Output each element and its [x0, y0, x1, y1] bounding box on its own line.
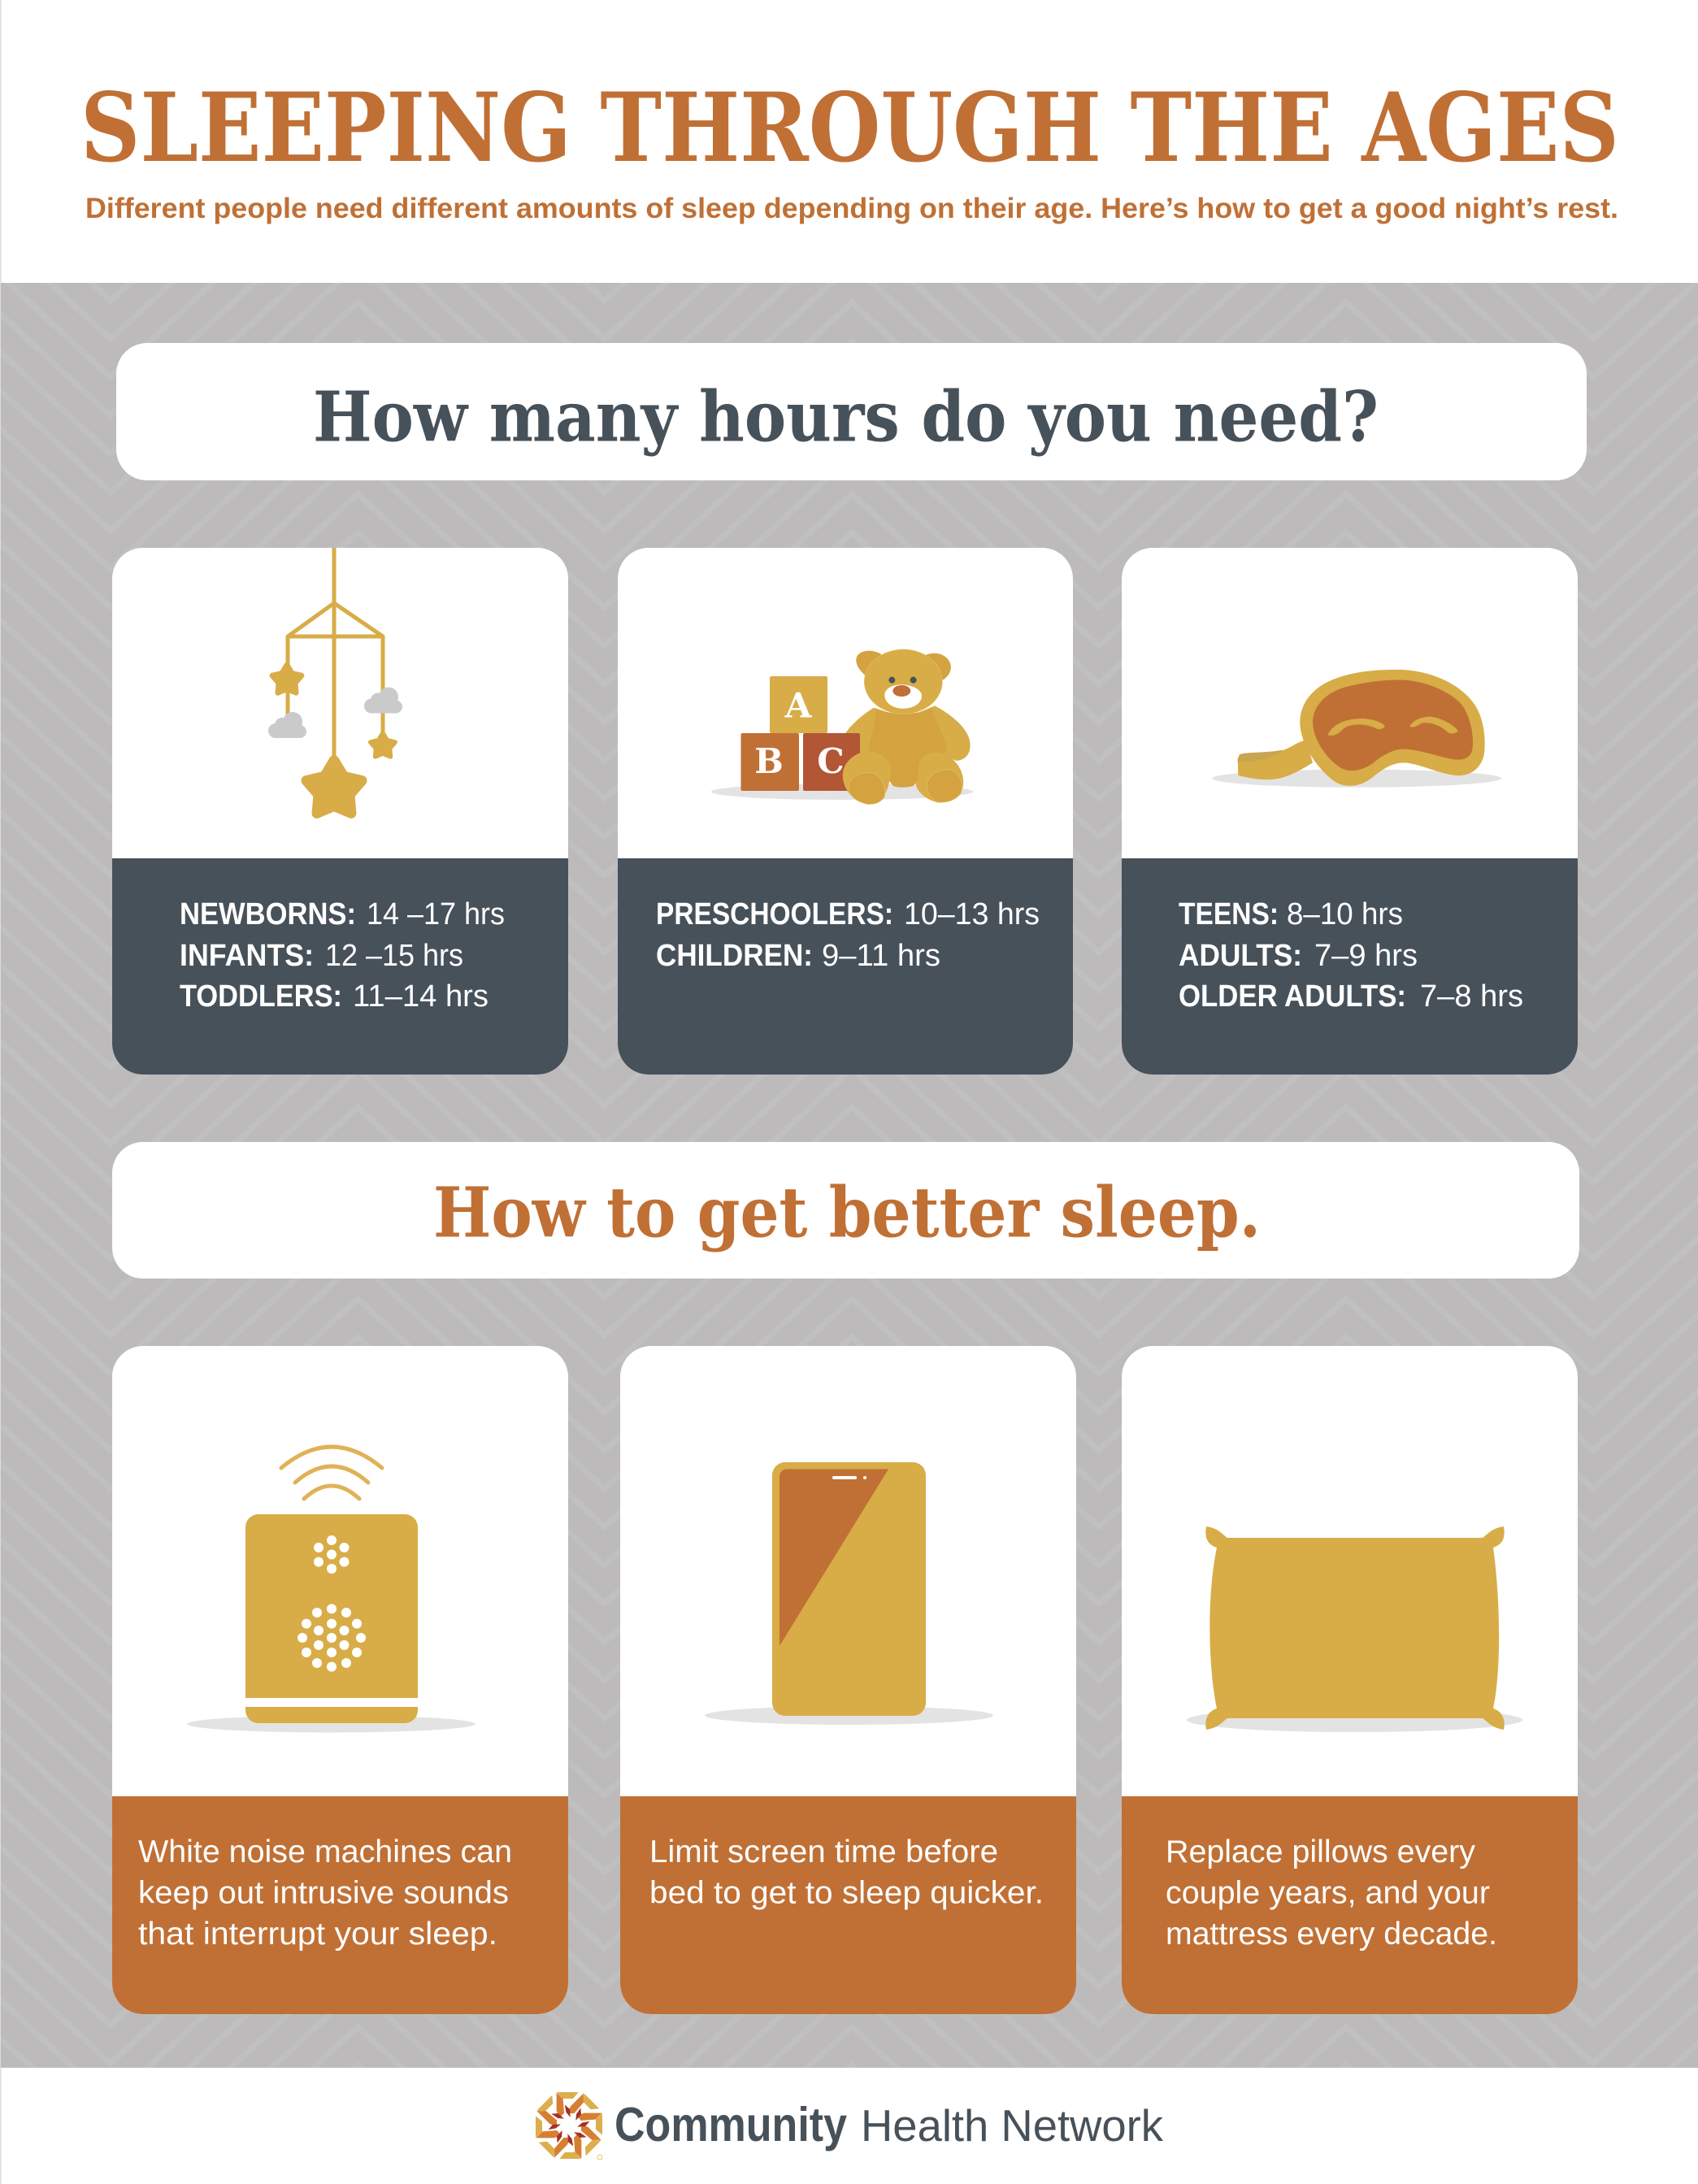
- text: newborns: 14 –17 hrs: [367, 897, 505, 931]
- text: pillow tip: Replace pillows every: [1166, 1834, 1475, 1869]
- icon: teddy bear and blocks: [711, 649, 973, 804]
- text: teens: 8–10 hrs: [1287, 897, 1403, 931]
- bear front: head and legs: [843, 649, 963, 804]
- text: children: CHILDREN:: [656, 939, 813, 973]
- panel: pillow tip: [1122, 1346, 1578, 2014]
- text: toddlers: 11–14 hrs: [353, 979, 489, 1014]
- icon: baby mobile: [268, 548, 402, 814]
- text: screen time tip: [649, 1834, 1044, 1910]
- blocks: A B C: B: [754, 741, 784, 781]
- text: children: [656, 939, 940, 973]
- panel: screen time tip: [620, 1346, 1076, 2014]
- subtitle: Different people need different amounts of sleep depending on their age. Here’s how to get a good night’s rest.: [85, 193, 1618, 224]
- logo wordmark: health network: Health Network: [861, 2100, 1163, 2151]
- text: infants: [180, 939, 463, 973]
- text: teens: [1179, 897, 1403, 931]
- text: newborns: [180, 897, 505, 931]
- text: teens: TEENS:: [1179, 897, 1279, 931]
- text: adults: 7–9 hrs: [1314, 939, 1418, 973]
- panel: header: [80, 72, 1619, 224]
- text: adults: [1179, 939, 1418, 973]
- heading: how many hours: How many hours do you need?: [313, 377, 1379, 458]
- text: older adults: 7–8 hrs: [1420, 979, 1523, 1014]
- text: white noise tip: [138, 1834, 512, 1952]
- blocks: A B C: C: [817, 741, 845, 781]
- panel: white noise tip: [112, 1346, 568, 2014]
- icon: pillow: [1187, 1526, 1522, 1732]
- text: pillow tip: [1166, 1834, 1497, 1952]
- blocks: A B C: A: [784, 686, 813, 725]
- text: newborns: NEWBORNS:: [180, 897, 356, 931]
- text: preschoolers: 10–13 hrs: [904, 897, 1040, 931]
- text: toddlers: [180, 979, 489, 1014]
- text: pillow tip: couple years, and your: [1166, 1876, 1490, 1910]
- panel: newborns, infants, toddlers: [112, 548, 568, 1075]
- text: white noise tip: keep out intrusive sounds: [138, 1876, 509, 1910]
- panel: preschoolers, children: [618, 548, 1073, 1075]
- text: adults: ADULTS:: [1179, 939, 1302, 973]
- text: white noise tip: White noise machines can: [138, 1834, 512, 1869]
- panel: teens, adults, older adults: [1122, 548, 1578, 1075]
- panel: better sleep heading banner: [112, 1142, 1579, 1279]
- blocks: A B C: [741, 676, 860, 791]
- icon: sleep mask: [1212, 670, 1501, 788]
- icon: network star emblem: [533, 2090, 605, 2161]
- icon: smartphone: [705, 1462, 993, 1725]
- text: screen time tip: bed to get to sleep quicker.: [649, 1876, 1044, 1910]
- text: older adults: OLDER ADULTS:: [1179, 979, 1406, 1014]
- text: preschoolers: PRESCHOOLERS:: [656, 897, 893, 931]
- text: screen time tip: Limit screen time before: [649, 1834, 998, 1869]
- panel: hours heading banner: [116, 343, 1587, 480]
- logo wordmark: community: Community: [614, 2098, 847, 2151]
- icon: white noise machine: [187, 1447, 476, 1733]
- text: children: 9–11 hrs: [822, 939, 940, 973]
- heading: better sleep: How to get better sleep.: [433, 1173, 1261, 1254]
- text: toddlers: TODDLERS:: [180, 979, 342, 1014]
- text: infants: 12 –15 hrs: [325, 939, 463, 973]
- footer logo: [533, 2090, 1163, 2161]
- bear back: arms and torso: [844, 706, 971, 788]
- text: infants: INFANTS:: [180, 939, 314, 973]
- text: white noise tip: that interrupt your sleep.: [138, 1917, 497, 1952]
- text: pillow tip: mattress every decade.: [1166, 1917, 1497, 1952]
